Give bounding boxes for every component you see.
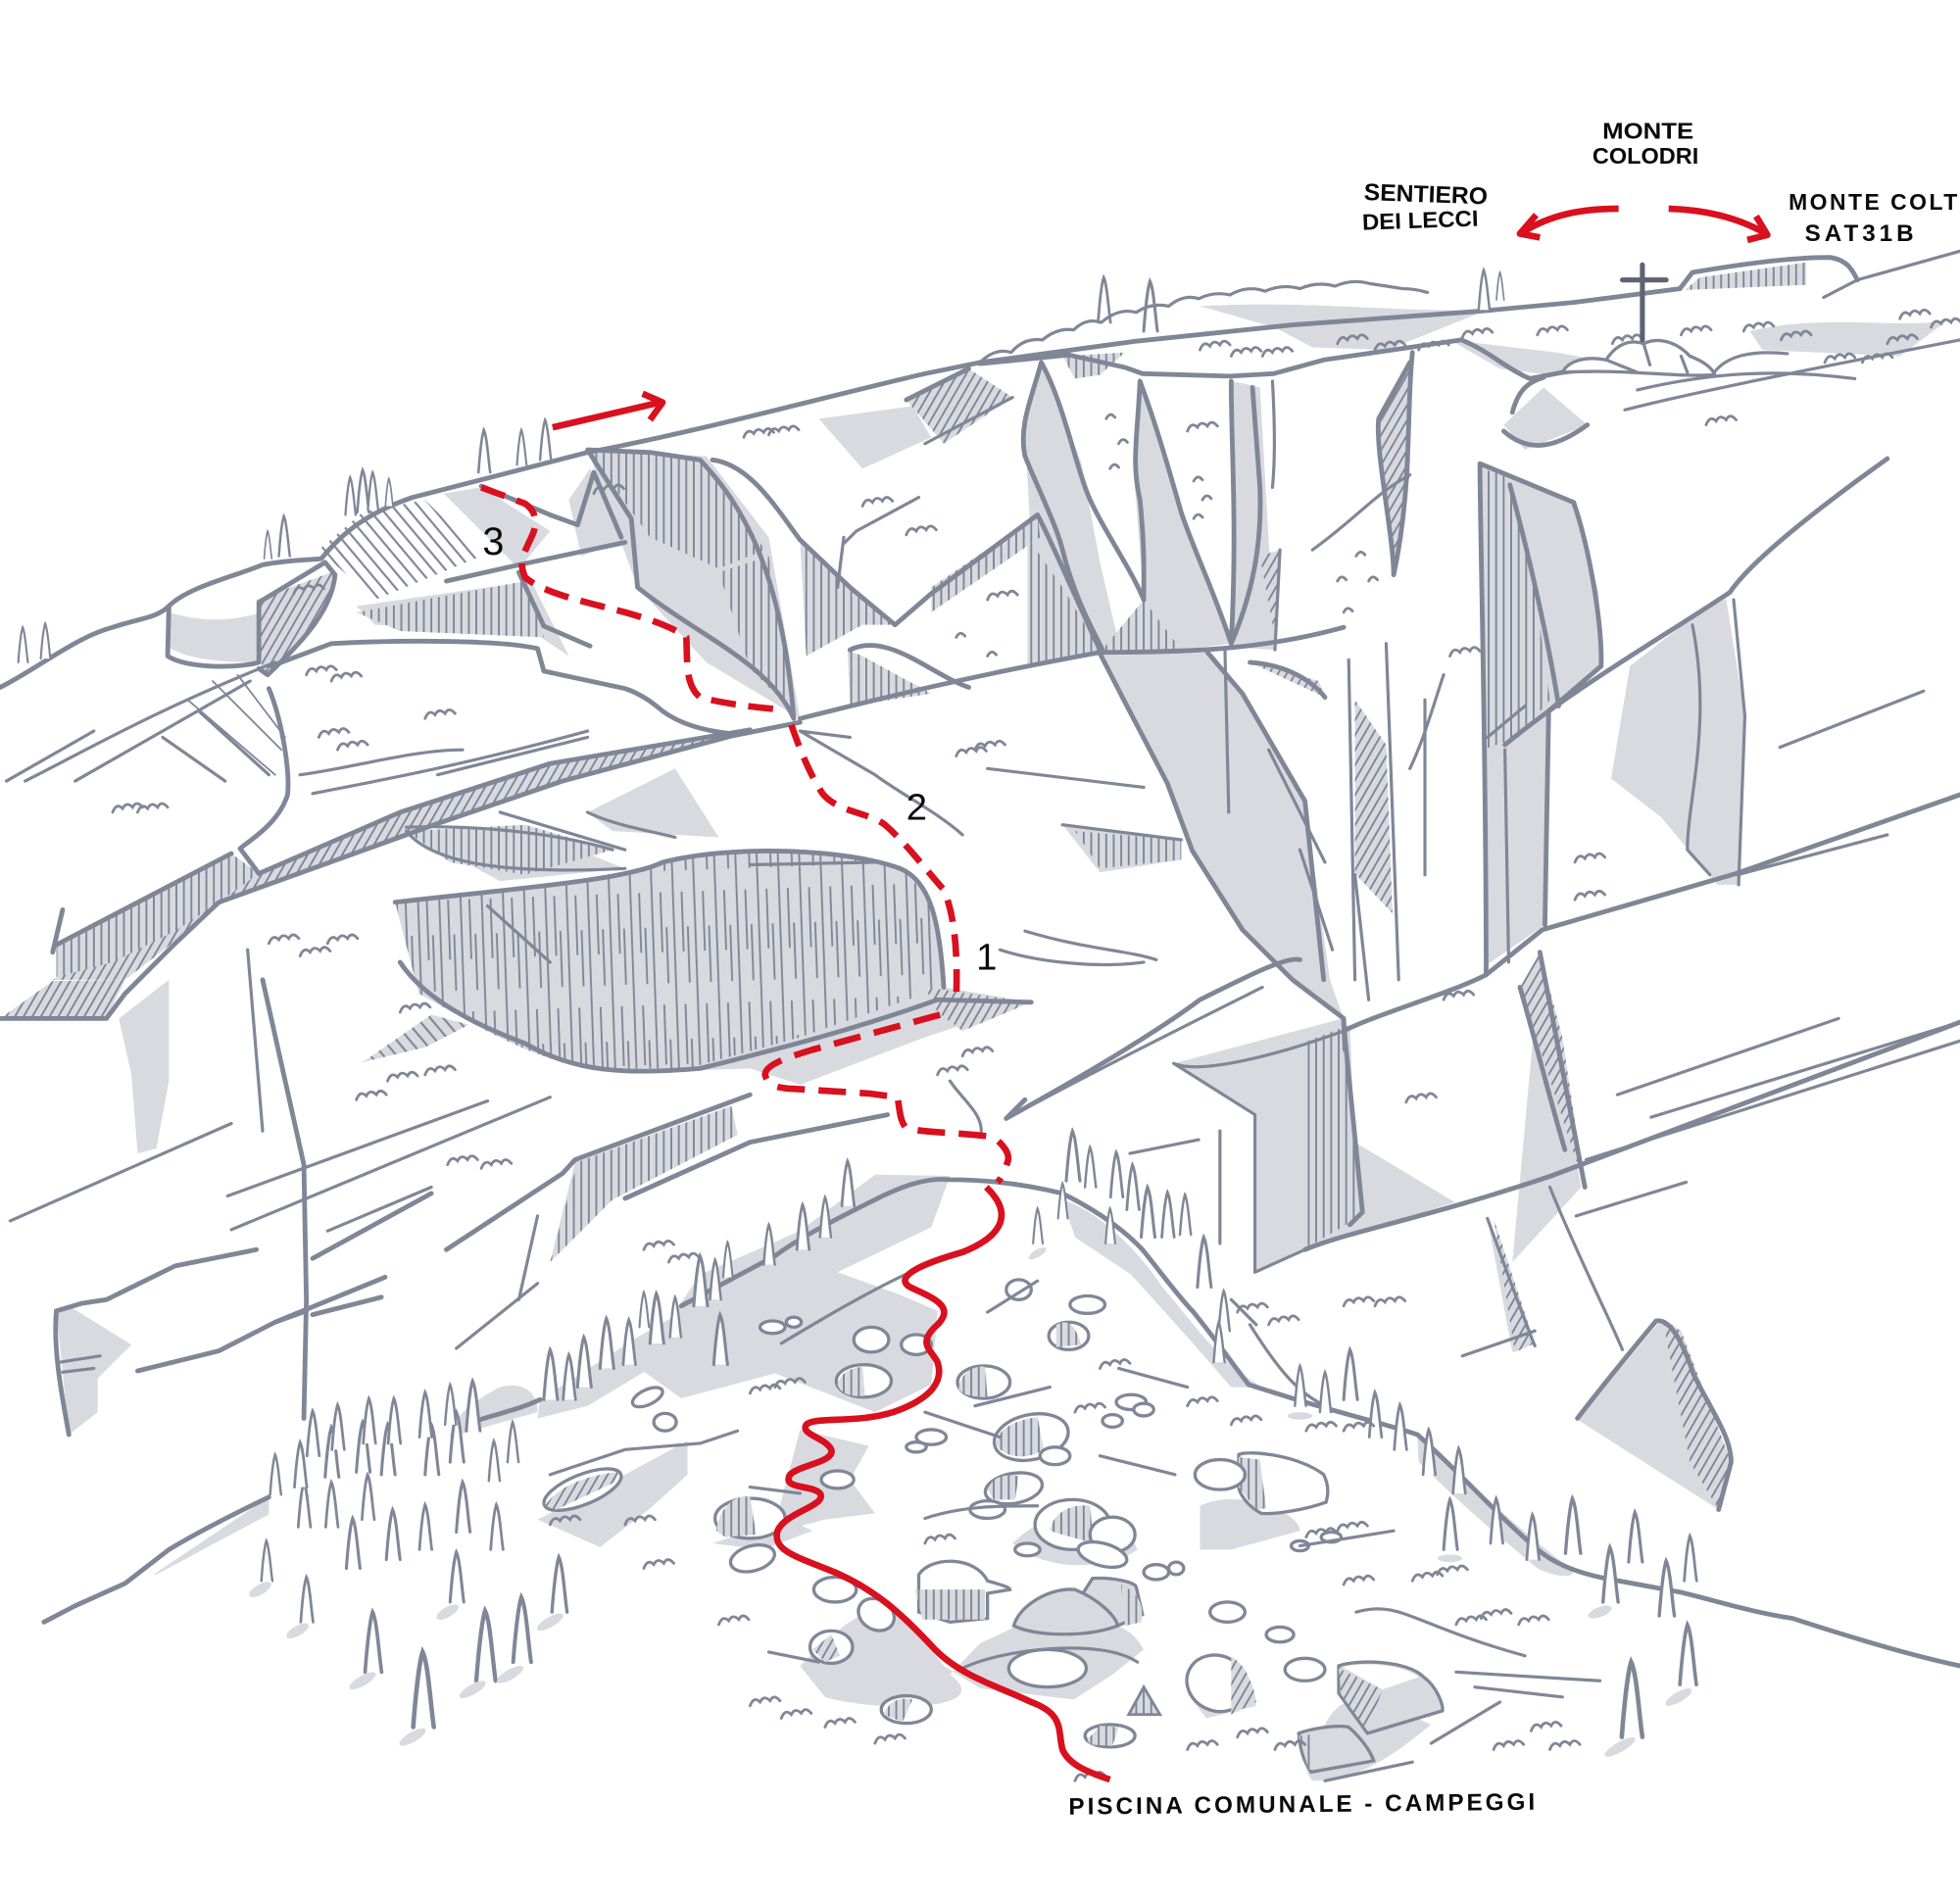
small ground marks <box>113 415 1737 1780</box>
red solid trail <box>777 1188 1110 1780</box>
label: Monte Colodri <box>1592 119 1698 169</box>
label: Monte Colt SAT 31B: MONTE COLT <box>1788 189 1960 215</box>
top bushes and summit rocks <box>980 281 1960 375</box>
tree shadows <box>247 1245 1694 1760</box>
arrow: ridge direction <box>553 394 662 427</box>
boulders <box>539 1280 1443 1772</box>
label: Sentiero dei Lecci: DEI LECCI <box>1362 206 1479 235</box>
label: Monte Colodri: COLODRI <box>1592 143 1698 169</box>
arrow: to Monte Colt <box>1669 209 1767 240</box>
arrow: to Sentiero dei Lecci <box>1520 209 1619 237</box>
number 1: 1 <box>976 937 997 979</box>
number 2: 2 <box>906 787 927 829</box>
trees <box>19 269 1696 1737</box>
ground contour <box>44 1179 1960 1666</box>
shaded rock faces <box>57 363 1744 1510</box>
cliff contour lines <box>0 251 1960 1510</box>
label: Monte Colt SAT 31B <box>1788 189 1960 247</box>
label: Sentiero dei Lecci <box>1362 179 1488 235</box>
label: Sentiero dei Lecci: SENTIERO <box>1363 179 1488 210</box>
red dashed trail <box>481 487 1008 1182</box>
summit cross <box>1623 265 1666 340</box>
hatched faces <box>0 263 1806 1510</box>
shaded ground <box>154 305 1950 1780</box>
label: Piscina Comunale - Campeggi: PISCINA COMUNALE - CAMPEGGI <box>1068 1789 1535 1821</box>
label: Monte Colt SAT 31B: SAT31B <box>1805 220 1914 247</box>
label: Monte Colodri: MONTE <box>1602 119 1693 144</box>
number 3: 3 <box>482 520 504 563</box>
